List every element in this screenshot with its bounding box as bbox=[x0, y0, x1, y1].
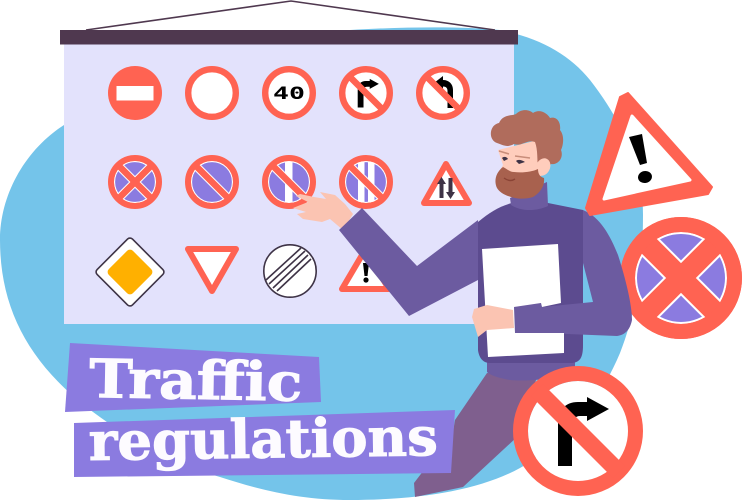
mouth bbox=[504, 178, 515, 180]
big sign: no right turn bbox=[520, 374, 636, 488]
man: legs bbox=[414, 373, 537, 497]
poster hanging wire bbox=[86, 1, 495, 30]
torso bbox=[478, 203, 583, 363]
face bbox=[498, 140, 544, 190]
sign: speed limit 40 bbox=[265, 69, 313, 117]
beard bbox=[495, 167, 544, 199]
sign: empty circle bbox=[188, 69, 236, 117]
head bbox=[491, 110, 563, 199]
sweater hem bbox=[487, 360, 575, 381]
ear bbox=[533, 156, 553, 178]
raised arm bbox=[339, 208, 478, 316]
sign: no stopping bbox=[111, 158, 159, 206]
poster panel bbox=[64, 44, 514, 324]
sign: no parking even days bbox=[342, 158, 390, 206]
big sign: warning bbox=[586, 93, 712, 215]
sign: no parking bbox=[188, 158, 236, 206]
holding hand bbox=[472, 305, 514, 337]
eyes bbox=[502, 157, 525, 164]
sign: give way bbox=[188, 249, 236, 291]
hair bbox=[491, 110, 563, 169]
sign: no left turn bbox=[419, 69, 467, 117]
man bbox=[293, 110, 632, 381]
collar bbox=[510, 182, 548, 210]
sign: end of restrictions bbox=[264, 245, 316, 297]
eyebrows bbox=[499, 151, 530, 158]
sign: speed limit 40: 40 bbox=[273, 84, 305, 104]
sign: warning on poster bbox=[342, 250, 389, 289]
paper sheet bbox=[482, 244, 564, 357]
title banner: regulations: regulations bbox=[88, 406, 438, 473]
sign: no right turn bbox=[342, 69, 390, 117]
sign: two-way traffic bbox=[424, 164, 469, 203]
poster top bar bbox=[60, 30, 518, 44]
right sleeve bbox=[514, 210, 632, 336]
sign: no entry bbox=[108, 66, 162, 120]
title banner: Traffic: Traffic bbox=[89, 348, 303, 414]
sign: priority road bbox=[95, 237, 165, 307]
big sign: no stopping bbox=[620, 217, 742, 339]
sign: no parking odd days bbox=[265, 158, 313, 206]
pointing hand bbox=[293, 192, 353, 230]
